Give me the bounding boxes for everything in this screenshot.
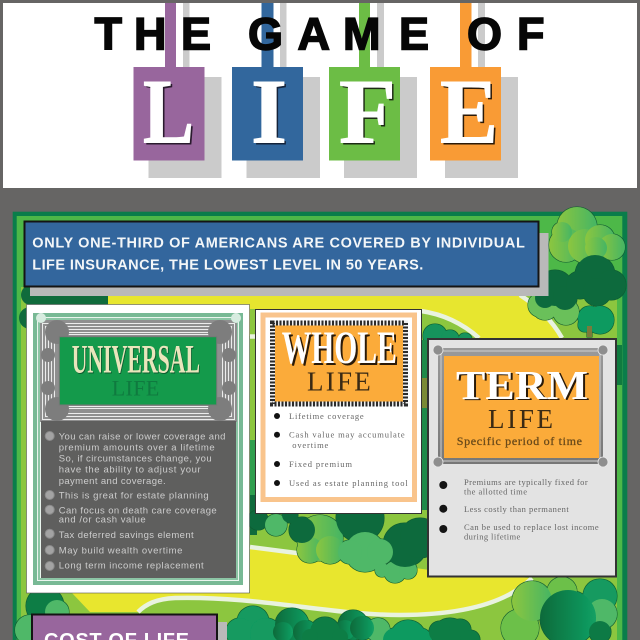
universal list text: You can raise or lower coverage and (59, 432, 225, 442)
term list text: during lifetime (464, 531, 521, 541)
universal list text: This is great for estate planning (59, 490, 209, 501)
panel: game board (13, 212, 627, 640)
whole bullets (274, 413, 280, 486)
peach border (263, 315, 414, 500)
term heading (456, 362, 590, 448)
term list text: Less costly than permanent (464, 504, 569, 514)
panel: cost of life (32, 614, 227, 640)
orange plaque (444, 356, 599, 458)
panel: universal life (26, 304, 250, 593)
term list text: Premiums are typically fixed for (464, 477, 588, 487)
universal list text: May build wealth overtime (59, 545, 182, 556)
whole list text: overtime (292, 440, 329, 450)
universal list text: Tax deferred savings element (59, 530, 194, 541)
trees: inner arc (423, 324, 472, 348)
term list text: the allotted time (464, 486, 527, 496)
universal heading: UNIVERSAL (72, 337, 200, 382)
tag: L: L (145, 62, 196, 164)
tag: F: F (339, 60, 396, 162)
term heading: LIFE (488, 404, 553, 434)
gray tag shadows (148, 3, 518, 178)
tag: I (232, 3, 303, 164)
term list text: Can be used to replace lost income (464, 522, 599, 532)
trees: gutter strips (250, 340, 622, 535)
plaque (59, 337, 217, 405)
whole list text: Fixed premium (289, 459, 352, 469)
panel: whole life (256, 310, 422, 514)
trees: top left (19, 285, 108, 329)
tag: E: E (442, 62, 500, 164)
term bullets (439, 481, 447, 533)
tag: L: L (143, 60, 194, 162)
road edges (138, 295, 562, 615)
trees: under whole life panel (248, 494, 440, 583)
trees: bottom middle (226, 606, 480, 640)
tag: F: F (341, 62, 398, 164)
whole heading: WHOLE (284, 324, 399, 376)
dark list panel (41, 421, 236, 578)
term heading: Specific period of time (457, 434, 582, 448)
universal list text (59, 432, 225, 572)
universal heading: UNIVERSAL (72, 338, 201, 382)
universal list text: premium amounts over a lifetime (59, 442, 215, 454)
tag: E: E (440, 60, 498, 162)
universal heading (72, 337, 201, 401)
panel: header (3, 3, 637, 188)
trees: bottom right (501, 577, 617, 640)
tag: F (329, 3, 400, 164)
panel: banner (24, 222, 548, 296)
term heading: TERM (456, 362, 588, 408)
gray striped frame (36, 313, 241, 422)
universal list text: have the ability to adjust your (59, 465, 201, 476)
yellow road field (100, 296, 564, 340)
universal list text: Can focus on death care coverage (59, 505, 217, 516)
title: THEGAMEOF (94, 8, 544, 60)
whole heading (282, 322, 399, 397)
gray frame (433, 345, 608, 467)
term list text (464, 477, 599, 541)
tag: E (430, 3, 501, 164)
universal list text: and /or cash value (59, 515, 146, 526)
banner text: ONLY ONE-THIRD OF AMERICANS ARE COVERED BY INDIVIDUAL (32, 235, 525, 251)
universal heading: LIFE (112, 376, 159, 401)
banner text (32, 235, 525, 273)
term heading: TERM (458, 363, 590, 409)
banner text: LIFE INSURANCE, THE LOWEST LEVEL IN 50 YEARS. (32, 257, 423, 273)
whole list text (289, 411, 408, 488)
tag: I: I (251, 60, 287, 162)
panel: term life (428, 339, 616, 576)
green frame (35, 315, 241, 583)
whole list text: Lifetime coverage (289, 411, 364, 421)
universal list text: Long term income replacement (59, 561, 204, 572)
orange plaque (272, 323, 406, 404)
trees: top right (528, 207, 626, 337)
tag: I: I (253, 62, 289, 164)
trees: bottom left (15, 587, 73, 640)
whole list text: Used as estate planning tool (289, 478, 408, 488)
universal list text: payment and coverage. (59, 476, 166, 487)
universal bullets (45, 432, 54, 570)
whole heading: LIFE (307, 367, 371, 397)
universal list text: So, if circumstances change, you (59, 454, 212, 465)
whole list text: Cash value may accumulate (289, 430, 405, 440)
whole heading: WHOLE (282, 322, 397, 374)
tag: L (134, 3, 204, 164)
